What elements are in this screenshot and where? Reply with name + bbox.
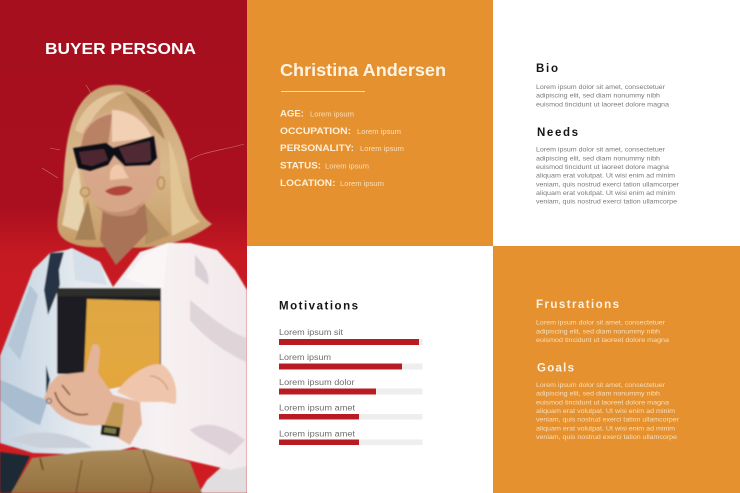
text: frustrations body <box>536 320 669 344</box>
profile: location <box>280 178 384 188</box>
panel: profile <box>247 0 493 246</box>
profile: age <box>280 108 354 118</box>
bar: lorem ipsum <box>279 353 422 370</box>
sunglasses <box>73 136 157 171</box>
text: frustrations body: euismod tincidunt ut laoreet dolore magna <box>536 337 669 344</box>
profile: personality <box>280 143 404 153</box>
profile: occupation: OCCUPATION: <box>280 126 351 136</box>
text: needs body: Lorem ipsum dolor sit amet, consectetuer <box>536 147 666 154</box>
profile: personality: Lorem ipsum <box>360 144 404 153</box>
profile: age: AGE: <box>280 108 304 118</box>
panel: motivations <box>279 300 422 445</box>
bar: lorem ipsum sit <box>279 328 422 345</box>
text: goals body: euismod tincidunt ut laoreet dolore magna <box>536 399 669 406</box>
bar: lorem ipsum: Lorem ipsum <box>279 353 331 362</box>
text: goals body: veniam, quis nostrud exerci tation ullamcorper <box>536 417 680 424</box>
profile: status: STATUS: <box>280 160 321 170</box>
text: goals body: aliquam erat volutpat. Ut wisi enim ad minim <box>536 408 675 415</box>
heading: buyer persona: BUYER PERSONA <box>45 41 196 58</box>
text: needs body: veniam, quis nostrud exerci tation ullamcorpe <box>536 199 677 206</box>
profile: location: LOCATION: <box>280 178 336 188</box>
heading: needs: Needs <box>537 127 578 139</box>
profile: location: Lorem ipsum <box>340 179 384 188</box>
profile: status <box>280 160 369 170</box>
name: Christina Andersen <box>280 60 446 80</box>
text: goals body: Lorem ipsum dolor sit amet, consectetuer <box>536 382 666 389</box>
text: frustrations body: adipiscing elit, sed diam nonummy nibh <box>536 328 660 335</box>
heading: motivations: Motivations <box>279 300 358 312</box>
heading: bio: Bio <box>536 63 558 75</box>
panel: needs <box>536 127 680 206</box>
profile: status: Lorem ipsum <box>325 162 369 170</box>
bar: lorem ipsum amet 2 <box>279 430 422 445</box>
heading: frustrations: Frustrations <box>536 299 619 311</box>
text: goals body: adipiscing elit, sed diam nonummy nibh <box>536 391 660 398</box>
flyaway hair strands <box>42 85 244 178</box>
text: goals body: veniam, quis nostrud exerci tation ullamcorpe <box>536 434 677 441</box>
bar: lorem ipsum amet: Lorem ipsum amet <box>279 404 356 412</box>
text: needs body: aliquam erat volutpat. Ut wisi enim ad minim <box>536 173 675 180</box>
heading: goals: Goals <box>537 362 574 374</box>
bar: lorem ipsum amet 2: Lorem ipsum amet <box>279 430 356 438</box>
profile: personality: PERSONALITY: <box>280 143 354 153</box>
text: needs body: euismod tincidunt ut laoreet dolore magna <box>536 164 669 171</box>
text: goals body: aliquam erat volutpat. Ut wisi enim ad minim <box>536 425 675 432</box>
bar: lorem ipsum amet <box>279 404 422 420</box>
text: bio body: adipiscing elit, sed diam nonummy nibh <box>536 93 660 100</box>
text: goals body <box>536 382 680 441</box>
text: needs body: veniam, quis nostrud exerci tation ullamcorper <box>536 181 680 188</box>
text: bio body: euismod tincidunt ut laoreet dolore magna <box>536 101 669 108</box>
panel: bio <box>536 63 669 108</box>
text: needs body <box>536 147 680 206</box>
text: frustrations body: Lorem ipsum dolor sit amet, consectetuer <box>536 320 666 327</box>
bar: lorem ipsum sit: Lorem ipsum sit <box>279 328 344 337</box>
text: bio body <box>536 84 669 108</box>
bar: lorem ipsum dolor: Lorem ipsum dolor <box>279 378 355 387</box>
text: needs body: aliquam erat volutpat. Ut wisi enim ad minim <box>536 190 675 197</box>
panel: portrait photo <box>0 0 247 493</box>
profile: occupation <box>280 126 401 136</box>
profile: occupation: Lorem ipsum <box>357 127 401 136</box>
text: needs body: adipiscing elit, sed diam nonummy nibh <box>536 155 660 162</box>
bar: lorem ipsum dolor <box>279 378 422 394</box>
profile: age: Lorem ipsum <box>310 110 354 118</box>
panel: frustrations and goals <box>493 246 740 493</box>
text: bio body: Lorem ipsum dolor sit amet, consectetuer <box>536 84 666 91</box>
